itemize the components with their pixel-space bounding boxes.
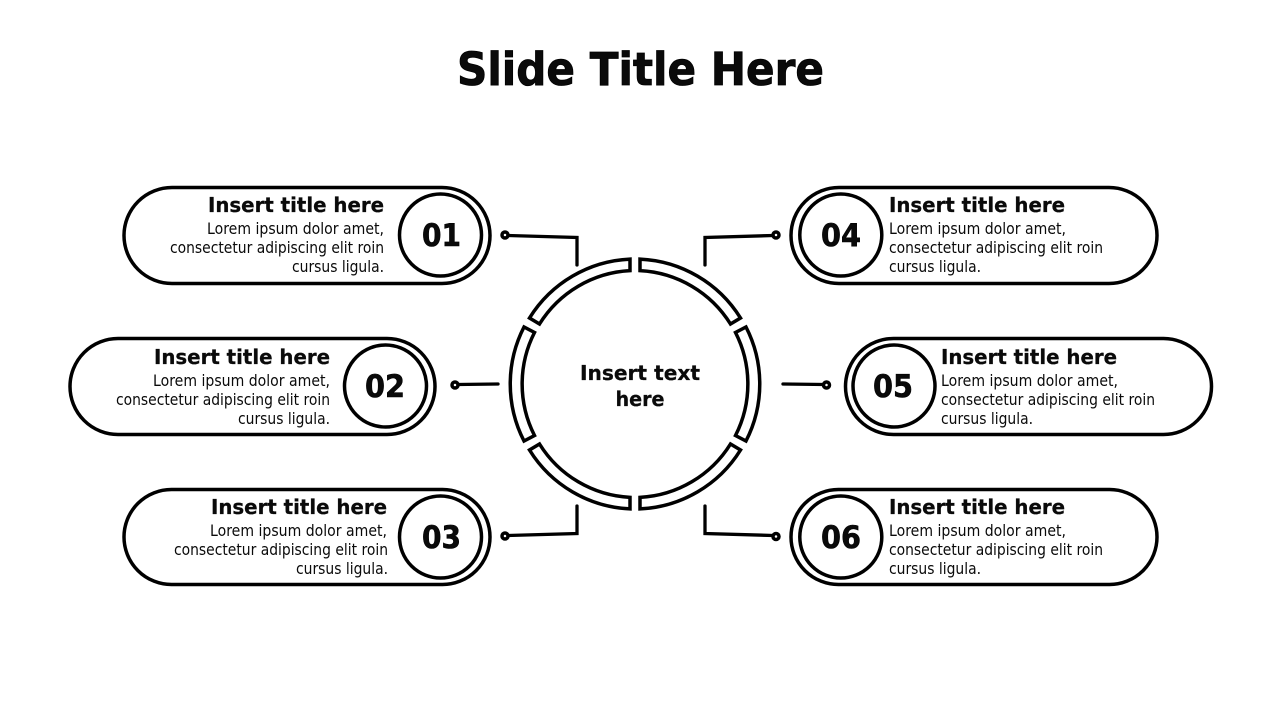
item body text: cursus ligula.	[292, 257, 384, 276]
item body text	[889, 521, 1103, 578]
number: 06	[821, 520, 861, 556]
connector: item 05	[783, 382, 830, 388]
item body text: consectetur adipiscing elit roin	[116, 390, 330, 409]
item body text	[941, 371, 1155, 428]
ring segment: left	[510, 327, 534, 441]
ring segment: right	[736, 327, 760, 441]
number: 05	[873, 369, 913, 405]
item body text: Lorem ipsum dolor amet,	[210, 521, 387, 540]
item body text: consectetur adipiscing elit roin	[889, 238, 1103, 257]
number: 01	[422, 218, 461, 254]
item title: Insert title here	[154, 345, 330, 369]
number circle	[400, 194, 482, 276]
connector: item 02	[452, 382, 498, 388]
panel: item 05	[846, 338, 1212, 434]
item body text: Lorem ipsum dolor amet,	[889, 521, 1066, 540]
number circle	[853, 345, 935, 427]
item body text: cursus ligula.	[889, 257, 981, 276]
item body text: Lorem ipsum dolor amet,	[889, 219, 1066, 238]
item title: Insert title here	[889, 193, 1065, 217]
ring segment: bottom left	[530, 444, 630, 509]
item body text: consectetur adipiscing elit roin	[889, 540, 1103, 559]
center ring	[510, 259, 760, 509]
number circle	[400, 496, 482, 578]
item body text	[116, 371, 330, 428]
panel: item 04	[791, 188, 1157, 284]
item body text: Lorem ipsum dolor amet,	[153, 371, 330, 390]
ring segment: top left	[530, 259, 630, 324]
pill outline	[791, 188, 1157, 284]
item title: Insert title here	[208, 193, 384, 217]
panel: item 06	[791, 490, 1157, 584]
center text: Insert text	[580, 361, 700, 385]
pill outline	[791, 490, 1157, 584]
pill outline	[124, 188, 490, 284]
number circle	[800, 496, 882, 578]
connector: item 06	[705, 506, 779, 540]
title: Slide Title Here	[457, 43, 824, 96]
connector: item 03	[502, 506, 577, 539]
item body text: consectetur adipiscing elit roin	[170, 238, 384, 257]
item body text	[170, 219, 384, 276]
item body text: Lorem ipsum dolor amet,	[207, 219, 384, 238]
item body text: consectetur adipiscing elit roin	[174, 540, 388, 559]
item body text: cursus ligula.	[238, 409, 330, 428]
item title: Insert title here	[889, 495, 1065, 519]
center text	[580, 361, 700, 411]
pill outline	[124, 490, 490, 584]
item body text: cursus ligula.	[296, 559, 388, 578]
ring segment: bottom right	[640, 444, 740, 509]
item body text	[889, 219, 1103, 276]
center text: here	[616, 387, 664, 411]
item title: Insert title here	[941, 345, 1117, 369]
panel: item 01	[124, 188, 490, 284]
item body text: consectetur adipiscing elit roin	[941, 390, 1155, 409]
pill outline	[846, 338, 1212, 434]
pill outline	[70, 338, 435, 434]
panel: item 03	[124, 490, 490, 584]
item body text	[174, 521, 388, 578]
panel: item 02	[70, 338, 435, 434]
item title: Insert title here	[211, 495, 387, 519]
number circle	[800, 194, 882, 276]
connector: item 04	[705, 232, 779, 265]
number: 04	[821, 218, 861, 254]
number circle	[344, 345, 426, 427]
item body text: cursus ligula.	[941, 409, 1033, 428]
ring segment: top right	[640, 259, 740, 324]
connector: item 01	[502, 232, 577, 265]
item body text: Lorem ipsum dolor amet,	[941, 371, 1118, 390]
number: 03	[422, 520, 461, 556]
number: 02	[365, 369, 405, 405]
item body text: cursus ligula.	[889, 559, 981, 578]
